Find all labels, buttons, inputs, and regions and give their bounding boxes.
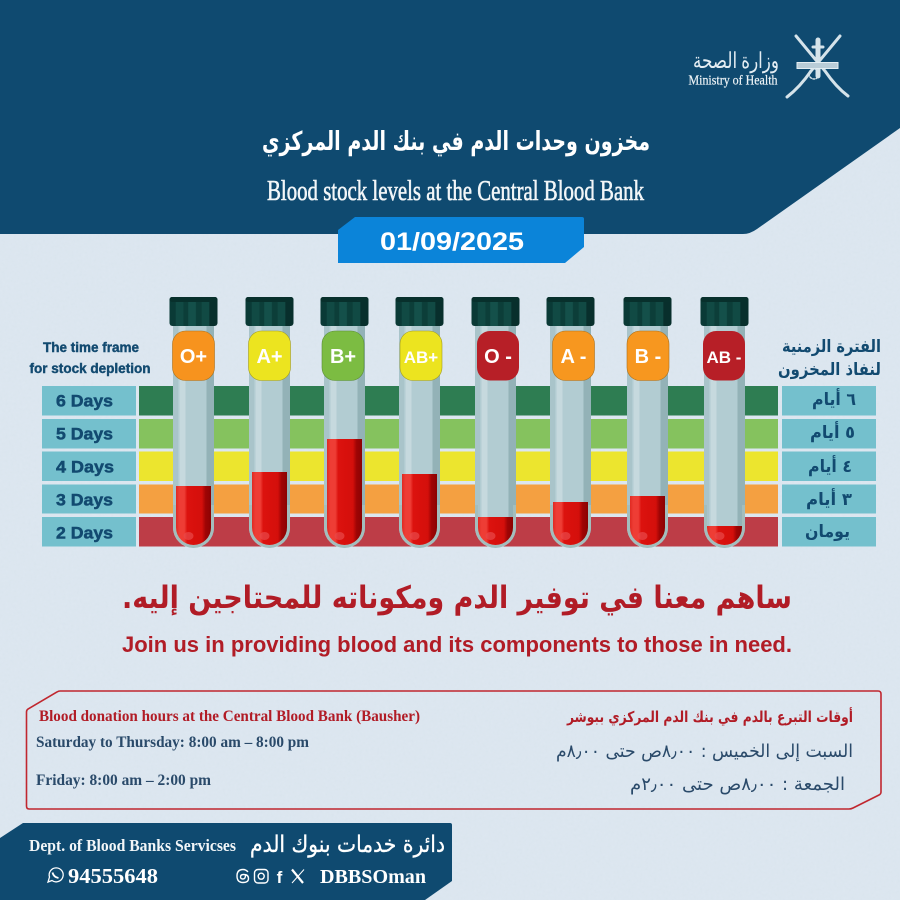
ministry name arabic: وزارة الصحة — [693, 48, 779, 74]
right day labels: يومان — [805, 522, 850, 542]
tube: AB+: AB+ — [404, 348, 438, 367]
slogan arabic: ساهم معنا في توفير الدم ومكوناته للمحتاجين إليه. — [122, 580, 792, 616]
department name arabic: دائرة خدمات بنوك الدم — [250, 832, 445, 858]
tube: A+: A+ — [256, 346, 283, 368]
left day labels: 6 Days — [56, 392, 113, 410]
right day labels: ٤ أيام — [808, 455, 852, 477]
panel: donation hours — [26, 691, 881, 809]
tube: A+ — [246, 297, 294, 551]
icon: national emblem — [787, 36, 848, 97]
logo: Ministry of Health — [688, 36, 848, 97]
left day labels: 2 Days — [56, 524, 113, 542]
panel: footer contact — [0, 823, 452, 900]
hours line: friday: Friday: 8:00 am – 2:00 pm — [36, 772, 211, 789]
ministry name english: Ministry of Health — [688, 72, 778, 88]
left day labels: 3 Days — [56, 490, 113, 510]
hours line arabic: friday: الجمعة : ٨٫٠٠ص حتى ٢٫٠٠م — [630, 774, 845, 795]
right day labels — [782, 386, 876, 546]
left axis heading: for stock depletion — [30, 361, 150, 376]
left axis heading: The time frame — [43, 340, 139, 355]
title english: Blood stock levels at the Central Blood Bank — [267, 175, 644, 207]
right day labels: ٦ أيام — [812, 388, 856, 410]
tube: AB- — [700, 297, 748, 551]
tube: A-: A - — [561, 346, 586, 368]
tube: B- — [624, 297, 672, 551]
tube: AB-: AB - — [707, 348, 741, 367]
phone number: 94555648 — [68, 864, 158, 888]
icon: instagram — [254, 870, 268, 883]
right day labels: ٣ أيام — [806, 488, 853, 510]
title arabic: مخزون وحدات الدم في بنك الدم المركزي — [262, 127, 650, 157]
tube: AB+ — [396, 297, 444, 551]
right axis heading: لنفاذ المخزون — [778, 360, 881, 380]
icon: x — [292, 870, 304, 883]
department name english: Dept. of Blood Banks Servicses — [29, 836, 237, 855]
level bands — [139, 386, 778, 546]
hours line arabic: saturday to thursday: السبت إلى الخميس : ٨٫٠٠ص حتى ٨٫٠٠م — [556, 741, 853, 762]
tube: O+ — [170, 297, 218, 551]
tube: O+: O+ — [180, 346, 207, 368]
tube: O- — [472, 297, 520, 551]
tube: O-: O - — [484, 346, 512, 368]
header banner — [0, 0, 900, 234]
social handle: DBBSOman — [320, 866, 426, 888]
left day labels — [42, 386, 136, 546]
date badge — [338, 217, 584, 263]
date: 01/09/2025 — [380, 228, 524, 256]
tube: B+ — [320, 297, 368, 551]
right axis heading: الفترة الزمنية — [782, 337, 881, 357]
icon: facebook: f — [277, 868, 283, 887]
tube: A- — [546, 297, 594, 551]
icon: threads — [237, 870, 248, 882]
icon: whatsapp — [48, 868, 63, 882]
right axis heading — [778, 337, 881, 380]
hours line: saturday to thursday: Saturday to Thursday: 8:00 am – 8:00 pm — [36, 734, 309, 751]
right day labels: ٥ أيام — [810, 421, 855, 443]
left axis heading — [30, 340, 150, 376]
left day labels: 4 Days — [56, 458, 114, 476]
hours heading english: Blood donation hours at the Central Blood Bank (Bausher) — [39, 708, 420, 725]
tube: B-: B - — [635, 346, 661, 368]
tube: B+: B+ — [330, 346, 356, 368]
left day labels: 5 Days — [56, 424, 113, 444]
slogan english: Join us in providing blood and its components to those in need. — [122, 632, 792, 657]
